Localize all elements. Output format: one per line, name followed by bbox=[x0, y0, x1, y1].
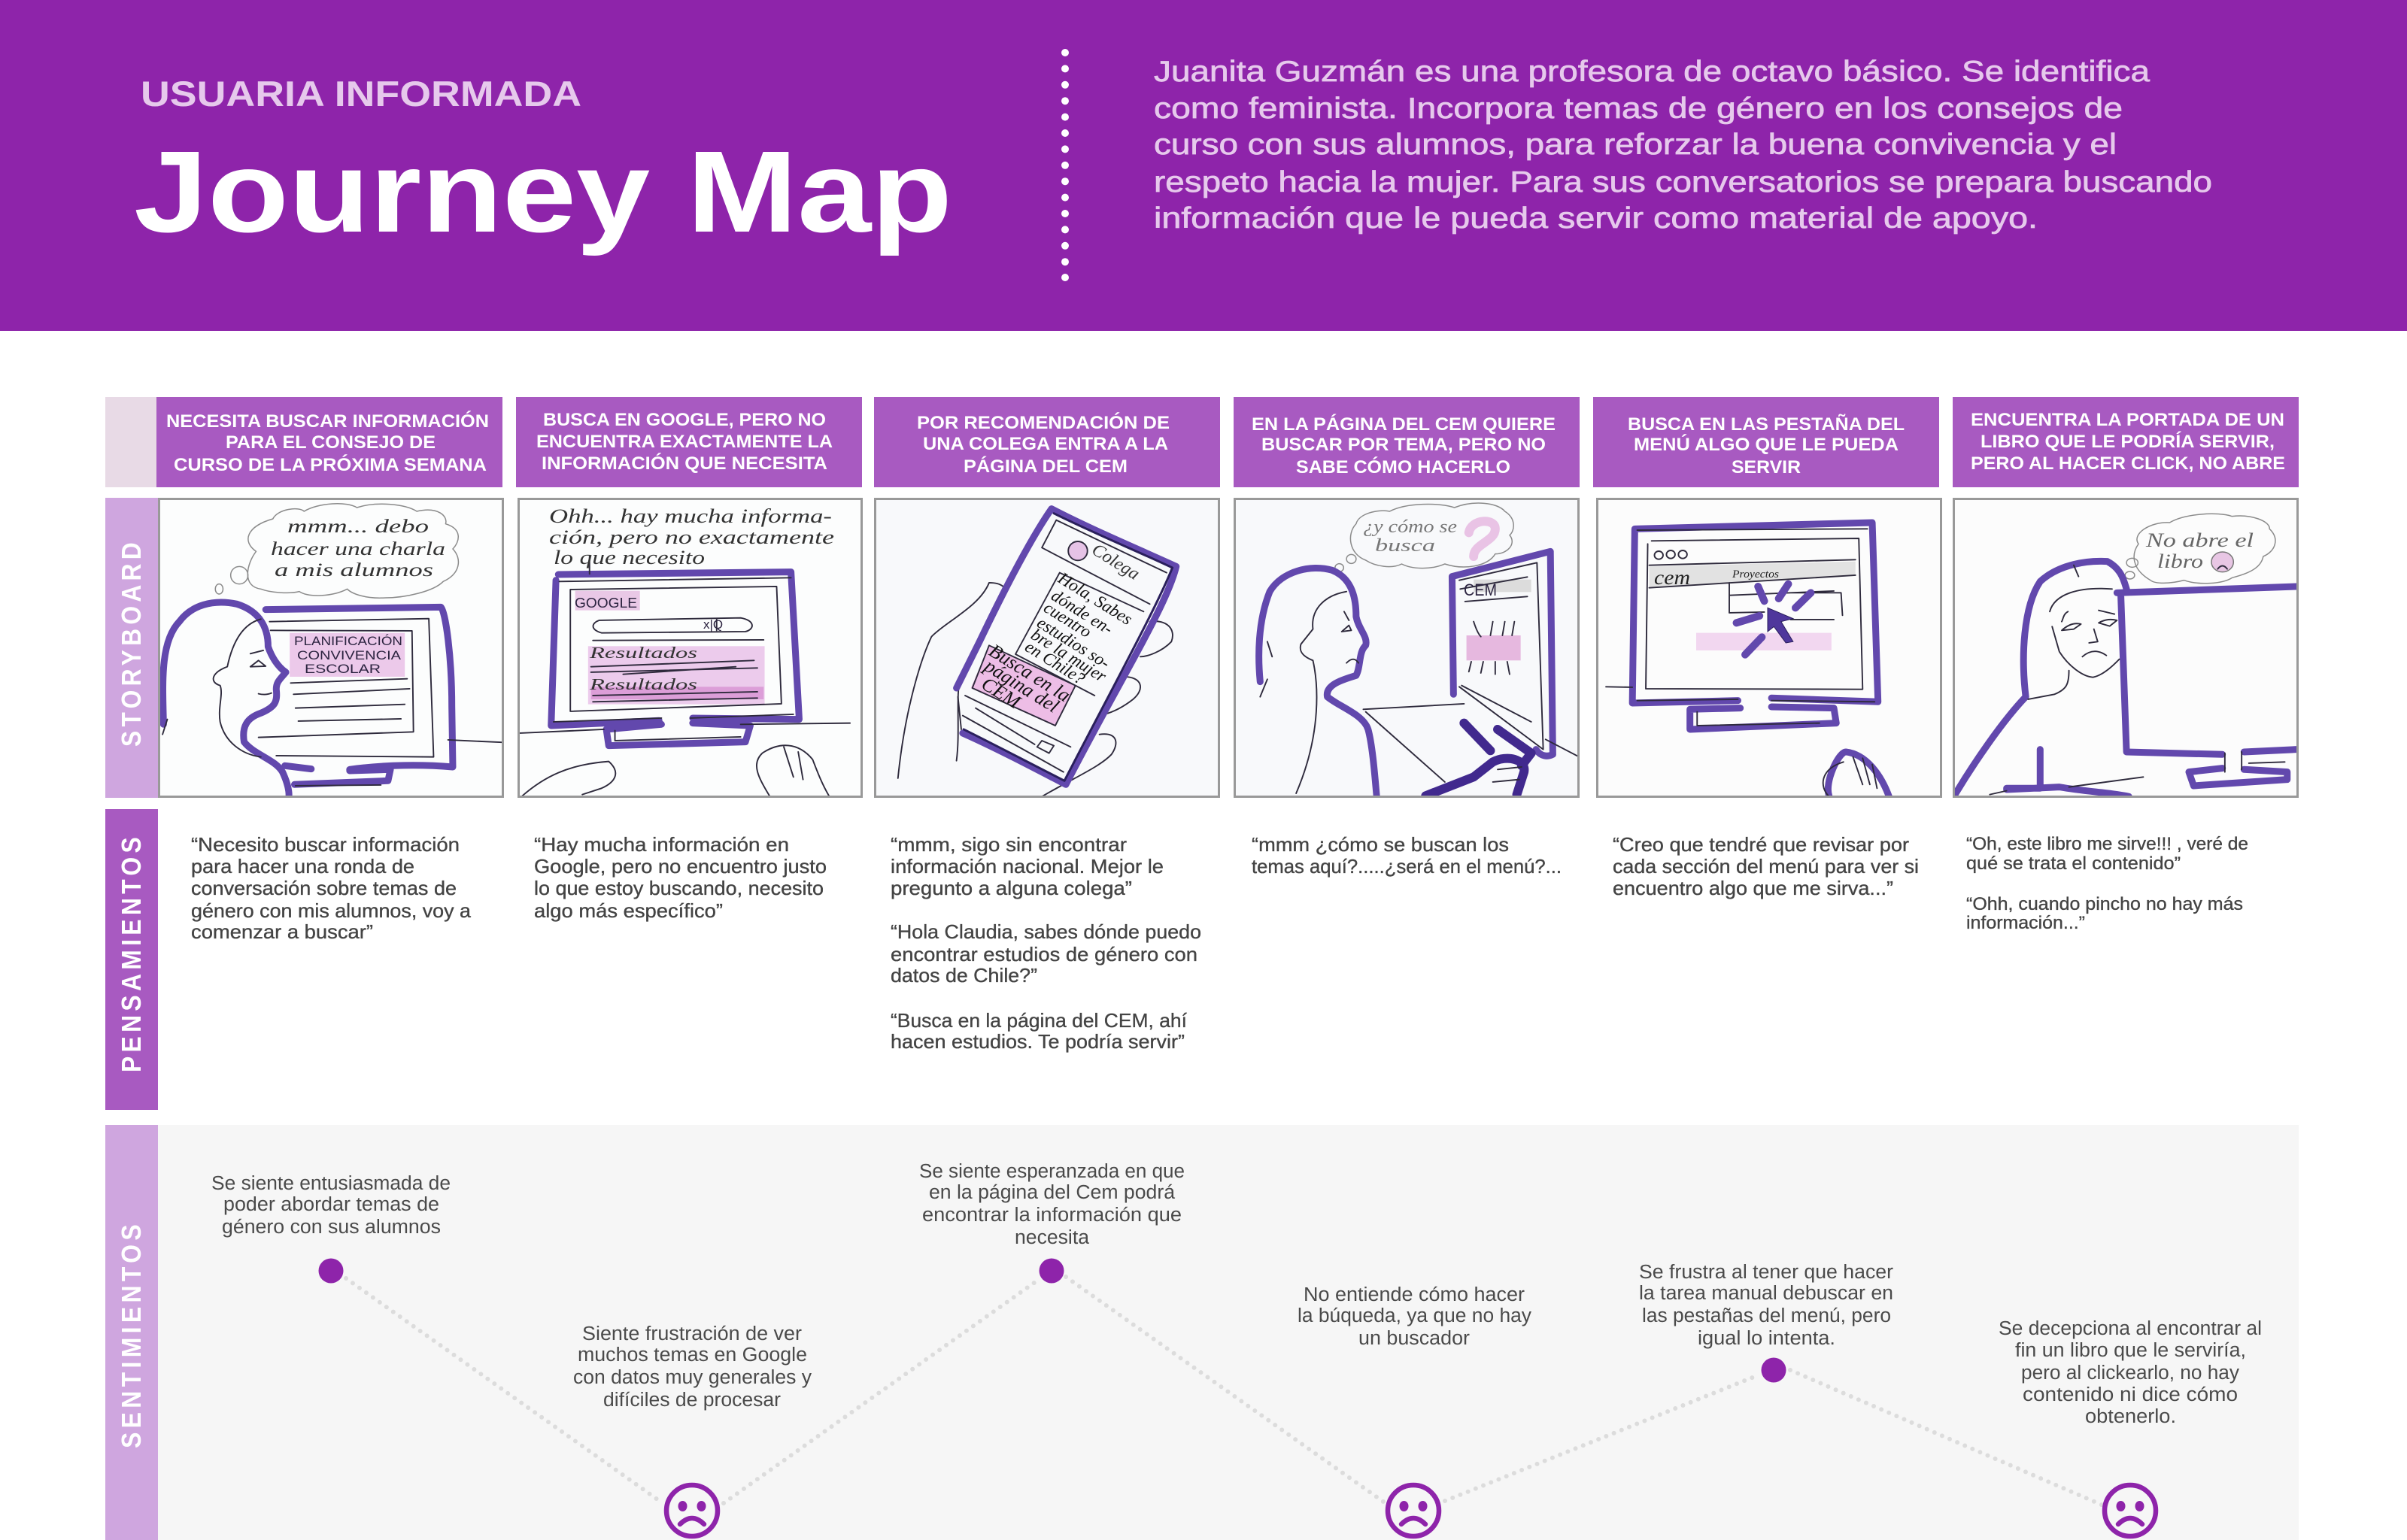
emotion point 4: sad face: un buscador bbox=[1358, 1328, 1471, 1349]
thought text: ¿y cómo se bbox=[1363, 517, 1457, 537]
sentimientos row label bbox=[105, 1125, 158, 1540]
thoughts stage 6: “Oh, este libro me sirve!!! , veré de bbox=[1966, 834, 2248, 854]
emotion point 2: sad face: con datos muy generales y bbox=[573, 1367, 812, 1388]
thoughts stage 3: “Hola Claudia, sabes dónde puedo bbox=[891, 920, 1201, 943]
storyboard sketch 1: woman thinking at computer bbox=[159, 499, 503, 798]
header band bbox=[0, 0, 2407, 331]
thought text: ESCOLAR bbox=[305, 662, 381, 676]
dotted divider bbox=[1061, 49, 1069, 281]
stage 1 header bbox=[156, 397, 502, 487]
handwritten note: Resultados bbox=[588, 644, 697, 662]
stage 2 header: INFORMACIÓN QUE NECESITA bbox=[542, 453, 827, 474]
sentimientos panel background bbox=[158, 1125, 2299, 1540]
emotion point 2: sad face: muchos temas en Google bbox=[578, 1344, 807, 1366]
stage 2 header bbox=[516, 397, 862, 487]
thought text: libro bbox=[2157, 550, 2203, 572]
thoughts stage 1: para hacer una ronda de bbox=[191, 855, 414, 878]
thought text bbox=[271, 517, 445, 676]
emotion point 2: sad face: difíciles de procesar bbox=[603, 1390, 782, 1411]
thoughts stage 6: “Ohh, cuando pincho no hay más bbox=[1966, 894, 2243, 914]
emotion point 3: encontrar la información que bbox=[922, 1205, 1182, 1226]
thoughts stage 2: Google, pero no encuentro justo bbox=[534, 855, 827, 878]
phone chat text: cuentro bbox=[1040, 598, 1094, 641]
emotion point 1: género con sus alumnos bbox=[222, 1217, 441, 1238]
subtitle: USUARIA INFORMADA bbox=[141, 74, 581, 114]
emotion point 5: igual lo intenta. bbox=[1698, 1328, 1835, 1349]
stage 6 header: LIBRO QUE LE PODRÍA SERVIR, bbox=[1981, 431, 2275, 452]
screen text: Proyectos bbox=[1732, 568, 1779, 581]
thoughts stage 6: información...” bbox=[1966, 913, 2085, 933]
emotion point 6: sad face: fin un libro que le serviría, bbox=[2015, 1340, 2246, 1361]
thoughts stage 3: pregunto a alguna colega” bbox=[891, 877, 1132, 899]
emotion point 1 bbox=[211, 1173, 451, 1283]
persona description: como feminista. Incorpora temas de género en los consejos de bbox=[1154, 92, 2123, 125]
thoughts stage 3 bbox=[891, 833, 1201, 1053]
stage 1 header: PARA EL CONSEJO DE bbox=[226, 432, 436, 453]
thoughts stage 3: “Busca en la página del CEM, ahí bbox=[891, 1009, 1188, 1032]
thoughts stage 1: “Necesito buscar información bbox=[191, 833, 460, 856]
stage 3 header bbox=[874, 397, 1220, 487]
phone chat text: Hola, Sabes bbox=[1055, 568, 1136, 629]
storyboard sketch 6: disappointed user bbox=[1953, 499, 2297, 797]
phone chat text: en Chile? bbox=[1021, 637, 1088, 689]
thoughts stage 2: algo más específico” bbox=[534, 899, 723, 922]
stage 2 header: BUSCA EN GOOGLE, PERO NO bbox=[543, 410, 826, 430]
thoughts stage 5: “Creo que tendré que revisar por bbox=[1613, 833, 1909, 856]
emotion point 1: poder abordar temas de bbox=[223, 1194, 439, 1215]
thoughts stage 3: datos de Chile?” bbox=[891, 964, 1037, 987]
handwritten note: Ohh... hay mucha informa- bbox=[549, 505, 832, 527]
persona description: información que le pueda servir como material de apoyo. bbox=[1154, 202, 2038, 235]
thoughts stage 1: conversación sobre temas de bbox=[191, 877, 457, 899]
handwritten note: lo que necesito bbox=[554, 547, 705, 568]
thoughts stage 3: información nacional. Mejor le bbox=[891, 855, 1164, 878]
thoughts stage 1: comenzar a buscar” bbox=[191, 920, 373, 943]
thoughts stage 2 bbox=[534, 833, 827, 922]
handwritten note bbox=[549, 505, 834, 693]
emotion point 2: sad face: Siente frustración de ver bbox=[582, 1323, 803, 1344]
emotion point 5: las pestañas del menú, pero bbox=[1642, 1305, 1891, 1326]
stage 5 header: MENÚ ALGO QUE LE PUEDA bbox=[1634, 434, 1899, 455]
stage 1 header: CURSO DE LA PRÓXIMA SEMANA bbox=[174, 454, 487, 475]
phone chat text bbox=[978, 540, 1143, 717]
emotion point 3: Se siente esperanzada en que bbox=[919, 1161, 1185, 1182]
thought text: No abre el bbox=[2145, 529, 2254, 551]
phone chat text: estudios so- bbox=[1034, 613, 1113, 672]
stage 2 header: ENCUENTRA EXACTAMENTE LA bbox=[536, 432, 833, 452]
stage 6 header: ENCUENTRA LA PORTADA DE UN bbox=[1971, 410, 2284, 430]
emotion point 4: sad face bbox=[1298, 1284, 1531, 1536]
emotion point 6: sad face: pero al clickearlo, no hay bbox=[2021, 1363, 2239, 1384]
stage 3 header: UNA COLEGA ENTRA A LA bbox=[923, 434, 1168, 454]
thoughts stage 4: temas aquí?.....¿será en el menú?... bbox=[1252, 855, 1562, 878]
handwritten note: x|Q bbox=[703, 617, 723, 632]
screen text: cem bbox=[1654, 566, 1690, 589]
phone chat text: Busca en la bbox=[985, 639, 1074, 706]
thought text: busca bbox=[1375, 536, 1435, 556]
emotion point 5 bbox=[1639, 1262, 1894, 1382]
stage 4 header: SABE CÓMO HACERLO bbox=[1296, 456, 1510, 477]
thoughts stage 3: hacen estudios. Te podría servir” bbox=[891, 1030, 1185, 1053]
handwritten note: ción, pero no exactamente bbox=[549, 526, 834, 548]
stage 3 header: POR RECOMENDACIÓN DE bbox=[917, 412, 1170, 433]
thoughts stage 5 bbox=[1613, 833, 1919, 899]
thought text: CONVIVENCIA bbox=[297, 648, 402, 662]
thoughts stage 3: “mmm, sigo sin encontrar bbox=[891, 833, 1127, 856]
emotion point 3: en la página del Cem podrá bbox=[929, 1182, 1176, 1203]
screen text bbox=[1655, 570, 1778, 585]
storyboard sketch 2: google search results bbox=[519, 499, 862, 797]
phone chat text: dónde en- bbox=[1048, 586, 1116, 638]
storyboard row label bbox=[105, 498, 158, 798]
emotion point 2: sad face bbox=[573, 1323, 812, 1536]
thought text bbox=[2145, 532, 2254, 568]
storyboard sketch 4: confused user at CEM site bbox=[1235, 499, 1579, 797]
thoughts stage 5: encuentro algo que me sirva...” bbox=[1613, 877, 1893, 899]
emotion point 5: Se frustra al tener que hacer bbox=[1639, 1262, 1894, 1283]
thoughts stage 4 bbox=[1252, 833, 1562, 878]
stage 5 header: SERVIR bbox=[1732, 457, 1801, 477]
emotion point 6: sad face bbox=[1999, 1318, 2262, 1536]
stage 1 header: NECESITA BUSCAR INFORMACIÓN bbox=[166, 411, 489, 432]
persona description: respeto hacia la mujer. Para sus conversatorios se prepara buscando bbox=[1154, 166, 2212, 199]
stage 4 header: EN LA PÁGINA DEL CEM QUIERE bbox=[1252, 414, 1556, 435]
stage 4 header: BUSCAR POR TEMA, PERO NO bbox=[1261, 435, 1546, 455]
handwritten note: GOOGLE bbox=[575, 596, 637, 611]
emotion point 6: sad face: Se decepciona al encontrar al bbox=[1999, 1318, 2262, 1339]
thought text: PLANIFICACIÓN bbox=[294, 634, 402, 648]
emotion point 1: Se siente entusiasmada de bbox=[211, 1173, 451, 1194]
sentimientos row label: SENTIMIENTOS bbox=[116, 1220, 147, 1448]
emotion curve bbox=[346, 1277, 2103, 1505]
emotion point 4: sad face: la búqueda, ya que no hay bbox=[1298, 1305, 1531, 1326]
thoughts stage 6: qué se trata el contenido” bbox=[1966, 853, 2181, 874]
thought text bbox=[1363, 517, 1497, 599]
thoughts stage 1 bbox=[191, 833, 472, 943]
emotion point 3 bbox=[919, 1161, 1185, 1283]
stage 5 header bbox=[1593, 397, 1939, 487]
persona description bbox=[1154, 56, 2212, 235]
emotion point 6: sad face: contenido ni dice cómo bbox=[2023, 1384, 2238, 1405]
thoughts stage 2: “Hay mucha información en bbox=[534, 833, 789, 856]
thoughts stage 5: cada sección del menú para ver si bbox=[1613, 855, 1919, 878]
phone chat text: Colega bbox=[1088, 540, 1143, 584]
persona description: Juanita Guzmán es una profesora de octavo básico. Se identifica bbox=[1154, 56, 2150, 88]
phone chat text: bre la mujer bbox=[1027, 625, 1110, 687]
stage 5 header: BUSCA EN LAS PESTAÑA DEL bbox=[1628, 414, 1905, 435]
storyboard sketch 5: monitor menu click bbox=[1598, 499, 1941, 797]
phone chat text: página del bbox=[979, 653, 1063, 717]
storyboard sketch 3: phone chat with colleague bbox=[876, 499, 1219, 797]
stage 3 header: PÁGINA DEL CEM bbox=[964, 456, 1128, 477]
thought text: CEM bbox=[1464, 581, 1497, 599]
thought text: mmm... debo bbox=[287, 517, 429, 537]
emotion point 5: la tarea manual debuscar en bbox=[1639, 1283, 1893, 1304]
thoughts stage 6 bbox=[1966, 834, 2248, 933]
stage headers row bbox=[105, 397, 2299, 487]
emotion point 4: sad face: No entiende cómo hacer bbox=[1304, 1284, 1525, 1305]
handwritten note: Resultados bbox=[588, 675, 697, 693]
thoughts stage 1: género con mis alumnos, voy a bbox=[191, 899, 472, 922]
persona description: curso con sus alumnos, para reforzar la buena convivencia y el bbox=[1154, 129, 2117, 161]
thoughts stage 3: encontrar estudios de género con bbox=[891, 943, 1197, 966]
stage 6 header bbox=[1953, 397, 2299, 487]
pensamientos row label: PENSAMIENTOS bbox=[116, 833, 147, 1072]
thoughts stage 4: “mmm ¿cómo se buscan los bbox=[1252, 833, 1509, 856]
stage 4 header bbox=[1234, 397, 1580, 487]
emotion point 3: necesita bbox=[1015, 1227, 1090, 1248]
thoughts stage 2: lo que estoy buscando, necesito bbox=[534, 877, 824, 899]
storyboard row label: STORYBOARD bbox=[116, 538, 147, 747]
stage 6 header: PERO AL HACER CLICK, NO ABRE bbox=[1971, 453, 2285, 474]
title: Journey Map bbox=[134, 127, 952, 256]
pensamientos row label bbox=[105, 809, 158, 1110]
emotion point 6: sad face: obtenerlo. bbox=[2085, 1406, 2176, 1427]
thought text: a mis alumnos bbox=[275, 560, 433, 581]
thought text: hacer una charla bbox=[271, 539, 445, 559]
phone chat text: CEM bbox=[978, 672, 1025, 714]
